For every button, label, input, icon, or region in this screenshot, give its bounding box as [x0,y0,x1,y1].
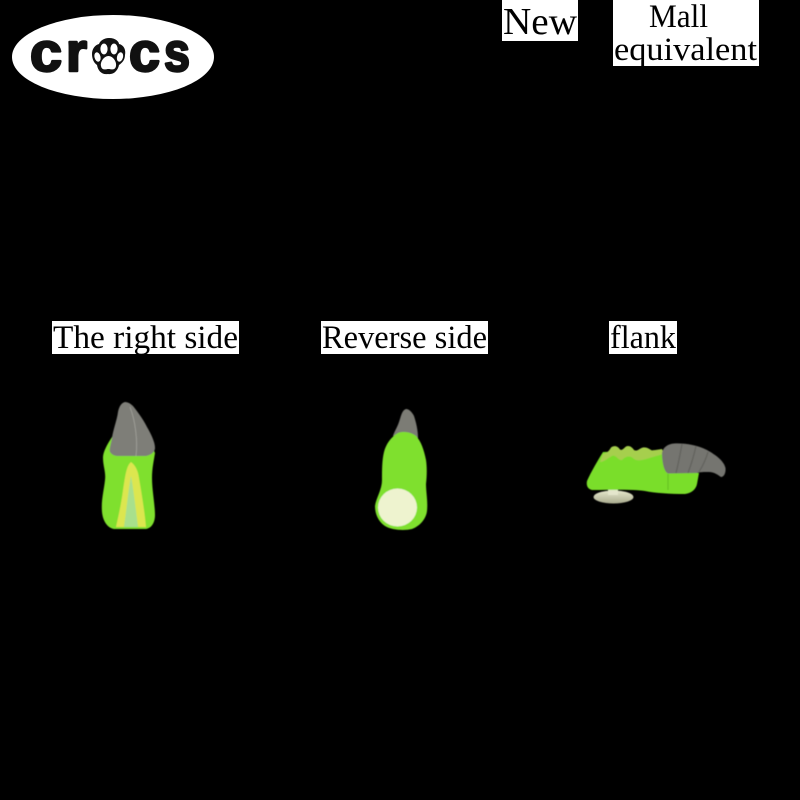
label: Mall equivalent [613,0,759,68]
label: flank: flank [610,320,676,356]
charm: reverse view [375,409,427,530]
label: Reverse side: Reverse side [322,320,487,356]
green body [587,450,699,494]
top bumps [600,446,664,462]
suction stem and base [594,488,634,504]
label: The right side: The right side [53,320,238,356]
logo wordmark: s [164,21,190,83]
green body [375,432,427,530]
suction disc [378,488,417,526]
tail ridges [676,444,708,473]
body seam [667,474,669,490]
logo wordmark [30,21,190,83]
pale stripe centre [124,476,138,527]
logo wordmark: c [129,21,160,83]
gray fin [393,409,418,438]
label: Mall equivalent: Mall [649,0,708,35]
logo wordmark: c [30,21,62,83]
gray tail [662,443,726,477]
green body [102,430,155,529]
fin ridge [130,407,137,456]
label: Mall equivalent: equivalent [614,32,757,68]
label: New: New [503,1,578,43]
logo: crocs [12,15,214,99]
logo wordmark: r [66,21,87,83]
icon: paw [92,38,125,74]
yellow stripe [116,462,146,527]
charm: right side view [102,402,155,529]
logo oval [12,15,214,99]
gray fin [110,402,155,456]
charm: flank view [587,443,726,504]
